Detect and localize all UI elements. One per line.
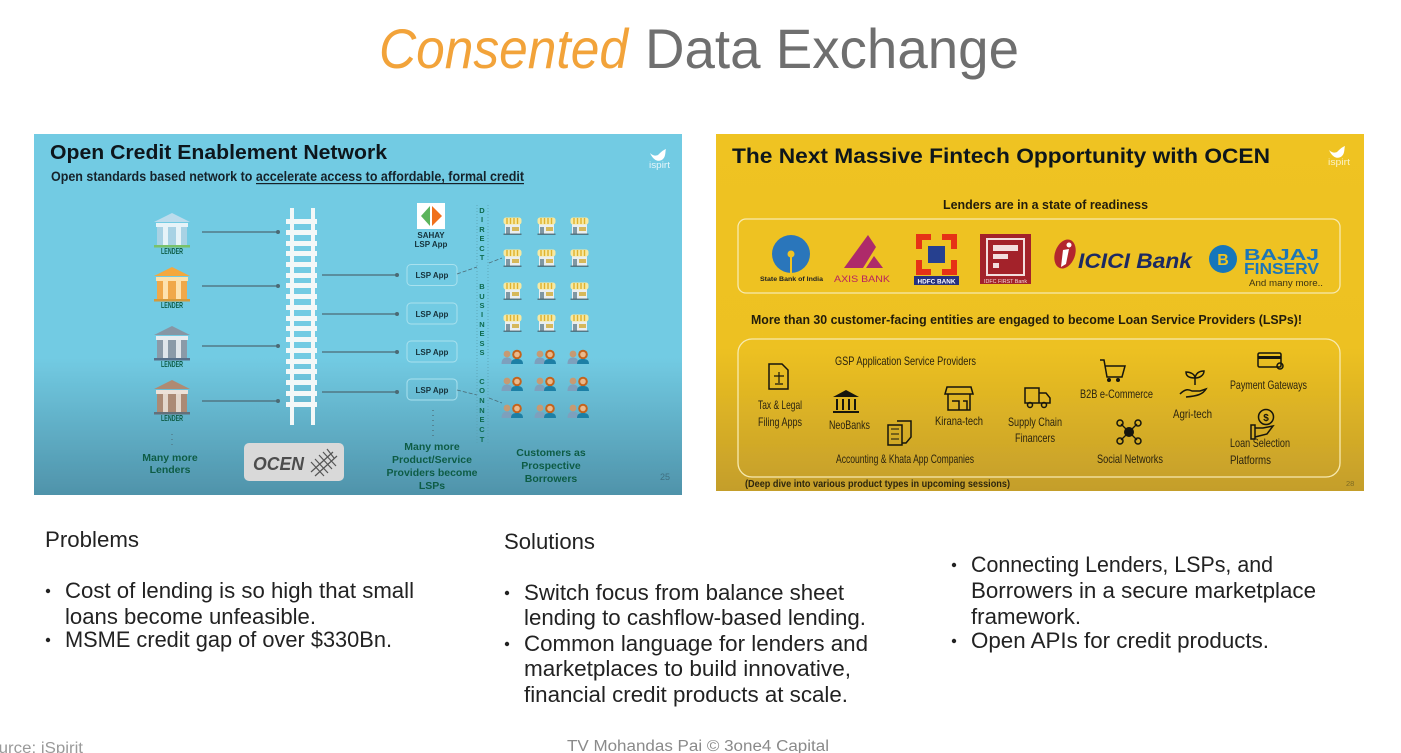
category: Agri-tech [1173,371,1212,421]
panel: The Next Massive Fintech Opportunity with OCEN [716,134,1364,491]
title [379,17,1019,80]
LSP App boxes: LSP App [416,271,449,280]
SAHAY LSP app: LSP App [415,240,448,249]
vertical label: direct business connect: O [479,386,485,395]
logo: Bajaj Finserv: FINSERV [1244,261,1320,278]
icon: iSpirit logo [1328,146,1351,167]
lenders heading: Lenders are in a state of readiness [943,198,1148,212]
category: GSP: GSP Application Service Providers [835,354,976,368]
lender labels: LENDER [161,413,183,423]
logo: Bajaj Finserv: B [1217,252,1229,269]
LSP App boxes: LSP App [416,386,449,395]
lender labels: LENDER [161,359,183,369]
vertical label: direct business connect: E [479,415,485,424]
category: Kirana-tech: Kirana-tech [935,414,983,428]
text block: marketplace framework: Connecting Lenders, LSPs, and [971,552,1273,577]
category: Payment Gateways [1230,353,1307,392]
vertical label: direct business connect [479,206,485,444]
category: Accounting [836,421,974,466]
Many more providers label: LSPs [419,480,445,492]
OCEN badge: OCEN [253,454,305,474]
text block: marketplace framework: framework. [971,604,1081,629]
Many more providers label: Providers become [386,467,478,479]
connector lines [202,230,399,403]
vertical label: direct business connect: B [479,282,485,291]
logo: IDFC First Bank: IDFC FIRST Bank [984,279,1028,285]
text block: solutions: financial credit products at scale. [524,682,848,707]
footnote: (Deep dive into various product types in upcoming sessions) [745,479,1010,490]
vertical label: direct business connect: N [479,406,485,415]
vertical label: direct business connect: E [479,234,485,243]
text block: solutions: marketplaces to build innovative, [524,656,851,681]
text block: marketplace framework [952,552,1316,653]
panel heading: Open Credit Enablement Network [50,142,388,164]
LSP App boxes: LSP App [416,348,449,357]
text block: solutions: lending to cashflow-based lending. [524,605,866,630]
category: Supply Chain: Supply Chain [1008,415,1062,429]
category: Social Networks: Social Networks [1097,452,1163,466]
icon: iSpirit logo: ispirt [1328,157,1351,167]
railway track [286,208,317,425]
logo: State Bank of India [760,235,823,283]
Many more lenders label: Lenders [150,464,191,476]
lenders box [738,219,1340,293]
LSP App boxes: LSP App [416,310,449,319]
vertical label: direct business connect: C [479,244,485,253]
text block: problems: Problems [45,527,139,552]
logo: Bajaj Finserv: And many more.. [1249,278,1323,288]
text block: marketplace framework: Borrowers in a secure marketplace [971,578,1316,603]
logo: Bajaj Finserv: BAJAJ [1244,247,1319,264]
category: NeoBanks [829,390,870,432]
dashed links [433,205,502,444]
Customers label: Borrowers [525,473,577,485]
logo: HDFC Bank [914,234,959,286]
category: Tax and Legal: Tax & Legal [758,398,802,412]
people icons [502,350,589,418]
Many more lenders label: Many more [142,452,198,464]
logo: HDFC Bank: HDFC BANK [918,278,956,286]
text block: solutions: Solutions [504,529,595,554]
category: Tax and Legal: Filing Apps [758,415,802,429]
text block: problems [45,527,414,652]
category: B2B e-Commerce [1080,360,1153,401]
Customers label [516,447,586,485]
vertical label: direct business connect: S [479,348,485,357]
vertical label: direct business connect: I [481,310,483,319]
logo: ICICI Bank [1050,236,1193,273]
panel subheading: Open standards based network to accelerate access to affordable, formal credit [51,168,524,184]
category: Loan Selection: $ [1263,413,1269,424]
vertical label: direct business connect: E [479,329,485,338]
vertical label: direct business connect: T [480,253,485,262]
LSP categories box [738,339,1340,477]
category: Accounting: Accounting & Khata App Companies [836,452,974,466]
text block: problems: Cost of lending is so high that small [65,578,414,603]
text block: solutions [504,529,868,707]
LSP heading: More than 30 customer-facing entities are engaged to become Loan Service Providers (LSPs)! [751,313,1302,327]
text block: marketplace framework: Open APIs for credit products. [971,628,1269,653]
category: Kirana-tech [935,387,983,428]
SAHAY LSP app [415,203,448,249]
LSP App boxes [407,264,457,400]
vertical label: direct business connect: C [479,425,485,434]
shop icons [504,218,588,332]
logo: Bajaj Finserv [1209,245,1323,288]
lender labels: LENDER [161,246,183,256]
icon: iSpirit logo [649,149,671,170]
vertical label: direct business connect: C [479,377,485,386]
category: NeoBanks: NeoBanks [829,418,870,432]
logo: IDFC First Bank [980,234,1031,285]
lender labels: LENDER [161,300,183,310]
Many more lenders label [142,434,198,476]
text block: solutions: Common language for lenders and [524,631,868,656]
category: Agri-tech: Agri-tech [1173,407,1212,421]
text block: solutions: Switch focus from balance sheet [524,580,844,605]
category: Loan Selection [1230,410,1290,467]
icon: iSpirit logo: ispirt [649,160,671,170]
vertical label: direct business connect: N [479,320,485,329]
Customers label: Customers as [516,447,586,459]
Many more providers label: Product/Service [392,454,472,466]
logo: Axis Bank [834,235,891,285]
lender labels [161,246,183,423]
text block: problems: loans become unfeasible. [65,604,316,629]
page number: 28 [1346,479,1354,488]
vertical label: direct business connect: N [479,396,485,405]
category: B2B e-Commerce: B2B e-Commerce [1080,387,1153,401]
category: Loan Selection: Platforms [1230,453,1271,467]
vertical label: direct business connect: U [479,292,485,301]
vertical label: direct business connect: D [479,206,485,215]
category: Social Networks [1097,420,1163,466]
title: Data Exchange [645,17,1019,80]
page number: 25 [660,472,670,482]
vertical label: direct business connect: I [481,215,483,224]
logo: Axis Bank: AXIS BANK [834,274,891,285]
vertical label: direct business connect: T [480,435,485,444]
category: Loan Selection: Loan Selection [1230,436,1290,450]
OCEN badge [244,443,344,481]
lender icons [154,213,190,414]
category: Payment Gateways: Payment Gateways [1230,378,1307,392]
text block: problems: MSME credit gap of over $330Bn. [65,627,392,652]
category: Supply Chain [1008,388,1062,445]
logo: State Bank of India: State Bank of India [760,276,823,283]
vertical label: direct business connect: R [479,225,485,234]
category: Tax and Legal [758,364,802,429]
panel: Open Credit Enablement Network [34,134,682,495]
title: Consented [379,17,630,80]
Many more providers label [386,441,478,492]
vertical label: direct business connect: S [479,301,485,310]
Many more providers label: Many more [404,441,460,453]
vertical label: direct business connect: S [479,339,485,348]
category: Supply Chain: Financers [1015,431,1055,445]
SAHAY LSP app: SAHAY [417,231,445,240]
logo: ICICI Bank: ICICI Bank [1078,250,1193,273]
Customers label: Prospective [521,460,581,472]
panel heading: The Next Massive Fintech Opportunity with OCEN [732,145,1270,168]
